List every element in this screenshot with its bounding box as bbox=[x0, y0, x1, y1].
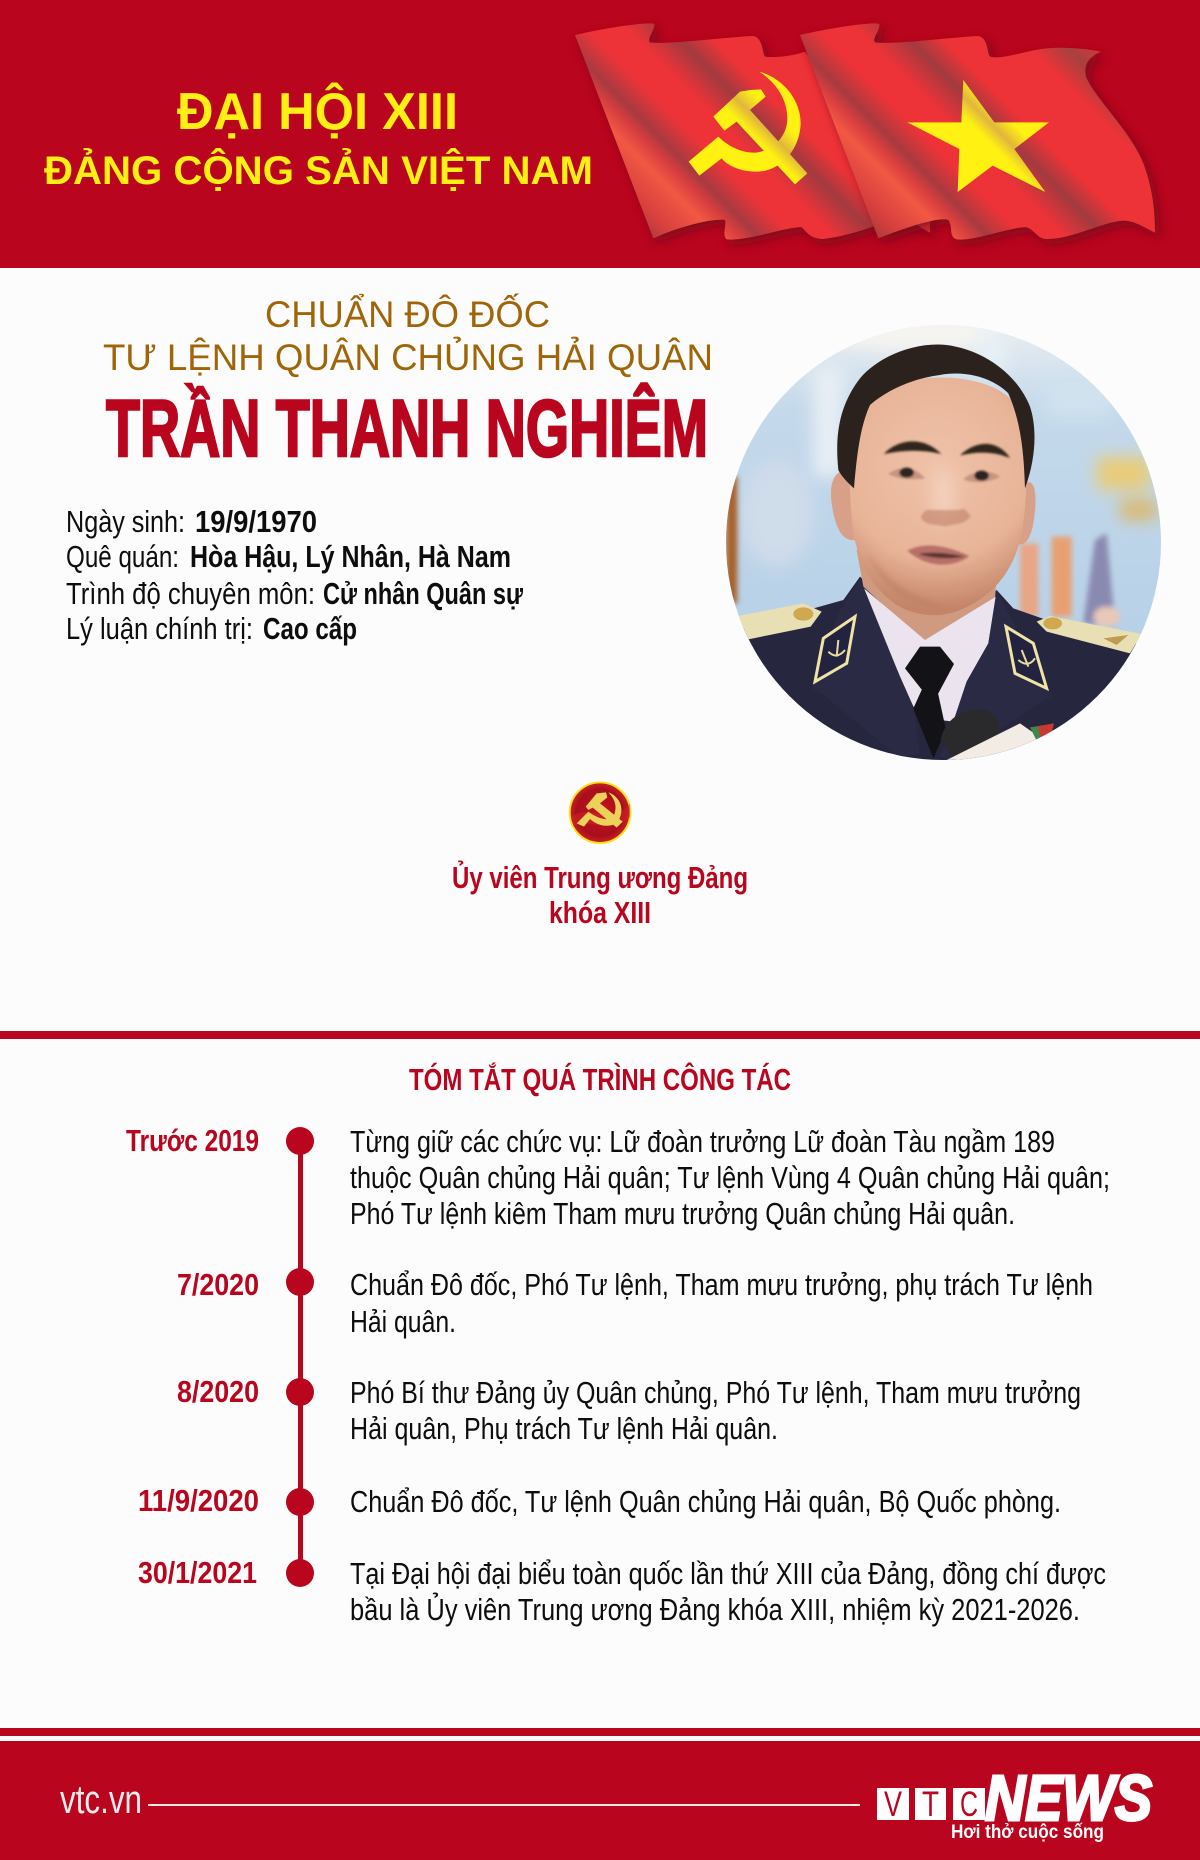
membership caption: Ủy viên Trung ương Đảng bbox=[452, 859, 748, 895]
left ear bbox=[831, 471, 855, 540]
rank and position heading: CHUẨN ĐÔ ĐỐC bbox=[265, 293, 550, 335]
political theory: Cao cấp bbox=[263, 611, 357, 646]
hair bbox=[837, 344, 1035, 488]
entry: before 2019 bbox=[126, 1123, 1110, 1231]
entry: 30/1/2021: 30/1/2021 bbox=[138, 1555, 257, 1590]
entry: 7/2020: Hải quân. bbox=[350, 1304, 456, 1339]
header title line 2: ĐẢNG CỘNG SẢN VIỆT NAM bbox=[44, 147, 593, 193]
mouth bbox=[907, 545, 969, 565]
portrait photo illustration bbox=[720, 317, 1170, 767]
right collar insignia bbox=[1006, 627, 1047, 688]
timeline bbox=[126, 1123, 1110, 1627]
jacket lapels bbox=[860, 585, 914, 757]
footer site name: vtc.vn bbox=[60, 1778, 142, 1822]
personal details bbox=[66, 504, 523, 646]
VTC News logo: V bbox=[884, 1785, 902, 1824]
education bbox=[66, 576, 523, 611]
entry: before 2019: Trước 2019 bbox=[126, 1123, 259, 1158]
home town: Hòa Hậu, Lý Nhân, Hà Nam bbox=[190, 539, 511, 574]
left shoulder board bbox=[737, 603, 822, 639]
national flag with star bbox=[800, 23, 1160, 244]
eyebrows bbox=[884, 441, 1010, 458]
left collar insignia bbox=[815, 617, 855, 682]
entry: 7/2020 bbox=[177, 1267, 1093, 1339]
entry: 11/9/2020: Chuẩn Đô đốc, Tư lệnh Quân chủng Hải quân, Bộ Quốc phòng. bbox=[350, 1484, 1061, 1519]
home town bbox=[66, 539, 511, 574]
star bbox=[907, 80, 1049, 192]
VTC News logo bbox=[877, 1762, 1152, 1843]
entry: 8/2020 bbox=[177, 1374, 1081, 1446]
rank and position heading: TƯ LỆNH QUÂN CHỦNG HẢI QUÂN bbox=[103, 336, 713, 378]
VTC News logo: T bbox=[922, 1785, 939, 1824]
entry: 11/9/2020 bbox=[138, 1483, 1061, 1519]
party flag with hammer and sickle bbox=[575, 23, 934, 244]
political theory: Lý luận chính trị: bbox=[66, 611, 253, 646]
entry: before 2019: Phó Tư lệnh kiêm Tham mưu trưởng Quân chủng Hải quân. bbox=[350, 1196, 1015, 1231]
eyes bbox=[888, 468, 1000, 482]
nose bbox=[921, 509, 971, 527]
entry: 8/2020: Hải quân, Phụ trách Tư lệnh Hải quân. bbox=[350, 1411, 778, 1446]
tie bbox=[905, 647, 954, 758]
VTC News logo: Hơi thở cuộc sống bbox=[951, 1822, 1104, 1843]
education: Trình độ chuyên môn: bbox=[66, 576, 315, 611]
entry: 8/2020: 8/2020 bbox=[177, 1374, 259, 1409]
membership caption: khóa XIII bbox=[549, 895, 651, 930]
microphone bbox=[940, 709, 1054, 763]
neck bbox=[857, 550, 998, 642]
right shoulder board bbox=[1037, 616, 1142, 653]
header title line 1: ĐẠI HỘI XIII bbox=[177, 82, 458, 141]
party emblem bbox=[570, 782, 630, 843]
birth date bbox=[66, 504, 317, 539]
footer bbox=[0, 1728, 1200, 1860]
birth date: Ngày sinh: bbox=[66, 504, 185, 539]
career summary heading: TÓM TẮT QUÁ TRÌNH CÔNG TÁC bbox=[409, 1061, 791, 1097]
education: Cử nhân Quân sự bbox=[323, 576, 523, 611]
VTC News logo: NEWS bbox=[985, 1762, 1152, 1834]
shirt collar bbox=[860, 585, 996, 722]
header banner bbox=[0, 0, 1200, 268]
hammer bbox=[713, 89, 807, 184]
entry: 11/9/2020: 11/9/2020 bbox=[138, 1483, 259, 1518]
entry: before 2019: Từng giữ các chức vụ: Lữ đoàn trưởng Lữ đoàn Tàu ngầm 189 bbox=[350, 1124, 1055, 1159]
face bbox=[850, 377, 1026, 615]
sickle bbox=[689, 72, 801, 176]
entry: 30/1/2021 bbox=[138, 1555, 1106, 1627]
rank and position heading bbox=[103, 293, 713, 378]
birth date: 19/9/1970 bbox=[195, 504, 317, 539]
membership caption bbox=[452, 859, 748, 930]
uniform jacket bbox=[737, 577, 1147, 767]
entry: 7/2020: 7/2020 bbox=[177, 1267, 259, 1302]
home town: Quê quán: bbox=[66, 539, 179, 574]
right ear bbox=[1019, 482, 1036, 544]
person name: TRẦN THANH NGHIÊM bbox=[106, 382, 708, 474]
VTC News logo: C bbox=[960, 1785, 978, 1824]
